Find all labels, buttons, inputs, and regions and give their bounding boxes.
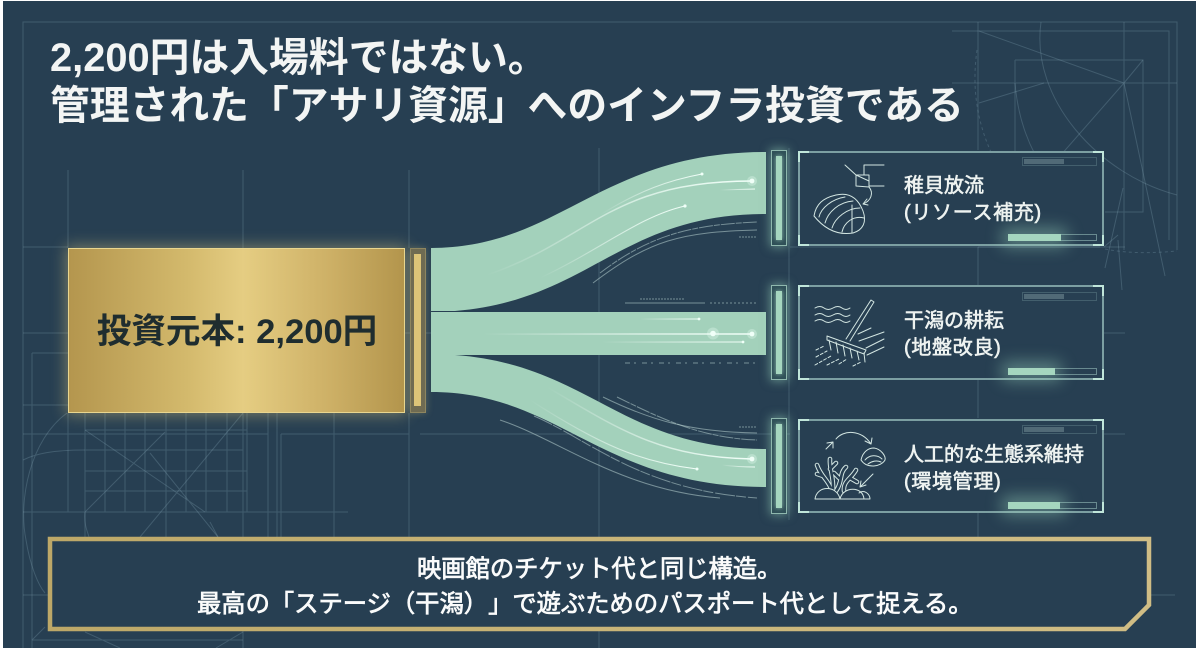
- icon: rake and waves: [814, 300, 884, 366]
- status bar: small: [1022, 157, 1097, 166]
- label: [904, 174, 1042, 224]
- thin data lines beside flows: [500, 222, 757, 498]
- label: (リソース補充): [904, 202, 1042, 224]
- flow highlight streaks: [483, 174, 755, 469]
- title: [50, 36, 964, 128]
- status bar: small: [1022, 292, 1097, 301]
- streak end points: [683, 172, 757, 470]
- label: [904, 444, 1084, 492]
- title: 2,200円は入場料ではない。: [50, 36, 548, 80]
- label: 稚貝放流: [904, 175, 984, 197]
- status bar: small: [1022, 425, 1097, 434]
- callout text: line 1: 映画館のチケット代と同じ構造。: [417, 556, 781, 583]
- label: [904, 310, 1004, 358]
- flow: bottom band: [431, 355, 766, 487]
- flow: top band: [431, 152, 766, 311]
- panel: juvenile clam release: [798, 151, 1104, 246]
- principal label: 投資元本: 2,200円: [97, 313, 377, 351]
- panel: investment principal: [68, 248, 405, 413]
- callout text: line 2: 最高の「ステージ（干潟）」で遊ぶためのパスポート代として捉える。: [197, 591, 973, 618]
- connector bar: bottom: [771, 418, 787, 514]
- icon: coral, clam and cycle: [814, 432, 886, 500]
- label: 干潟の耕耘: [904, 310, 1004, 332]
- status bar: progress: [1008, 234, 1097, 240]
- gold connector bar: [410, 248, 426, 413]
- panel: tidal flat tilling: [798, 285, 1104, 380]
- connector bar: middle: [771, 285, 787, 380]
- label: (地盤改良): [904, 336, 1002, 358]
- label: 人工的な生態系維持: [904, 444, 1084, 466]
- status bar: progress: [1008, 368, 1097, 374]
- connector bar: top: [771, 150, 787, 246]
- title: 管理された「アサリ資源」へのインフラ投資である: [50, 84, 964, 128]
- label: (環境管理): [904, 470, 1002, 492]
- flow: middle band: [431, 312, 766, 355]
- status bar: progress: [1008, 502, 1097, 508]
- icon: clam and release: [814, 164, 884, 234]
- panel: ecosystem maintenance: [798, 419, 1104, 513]
